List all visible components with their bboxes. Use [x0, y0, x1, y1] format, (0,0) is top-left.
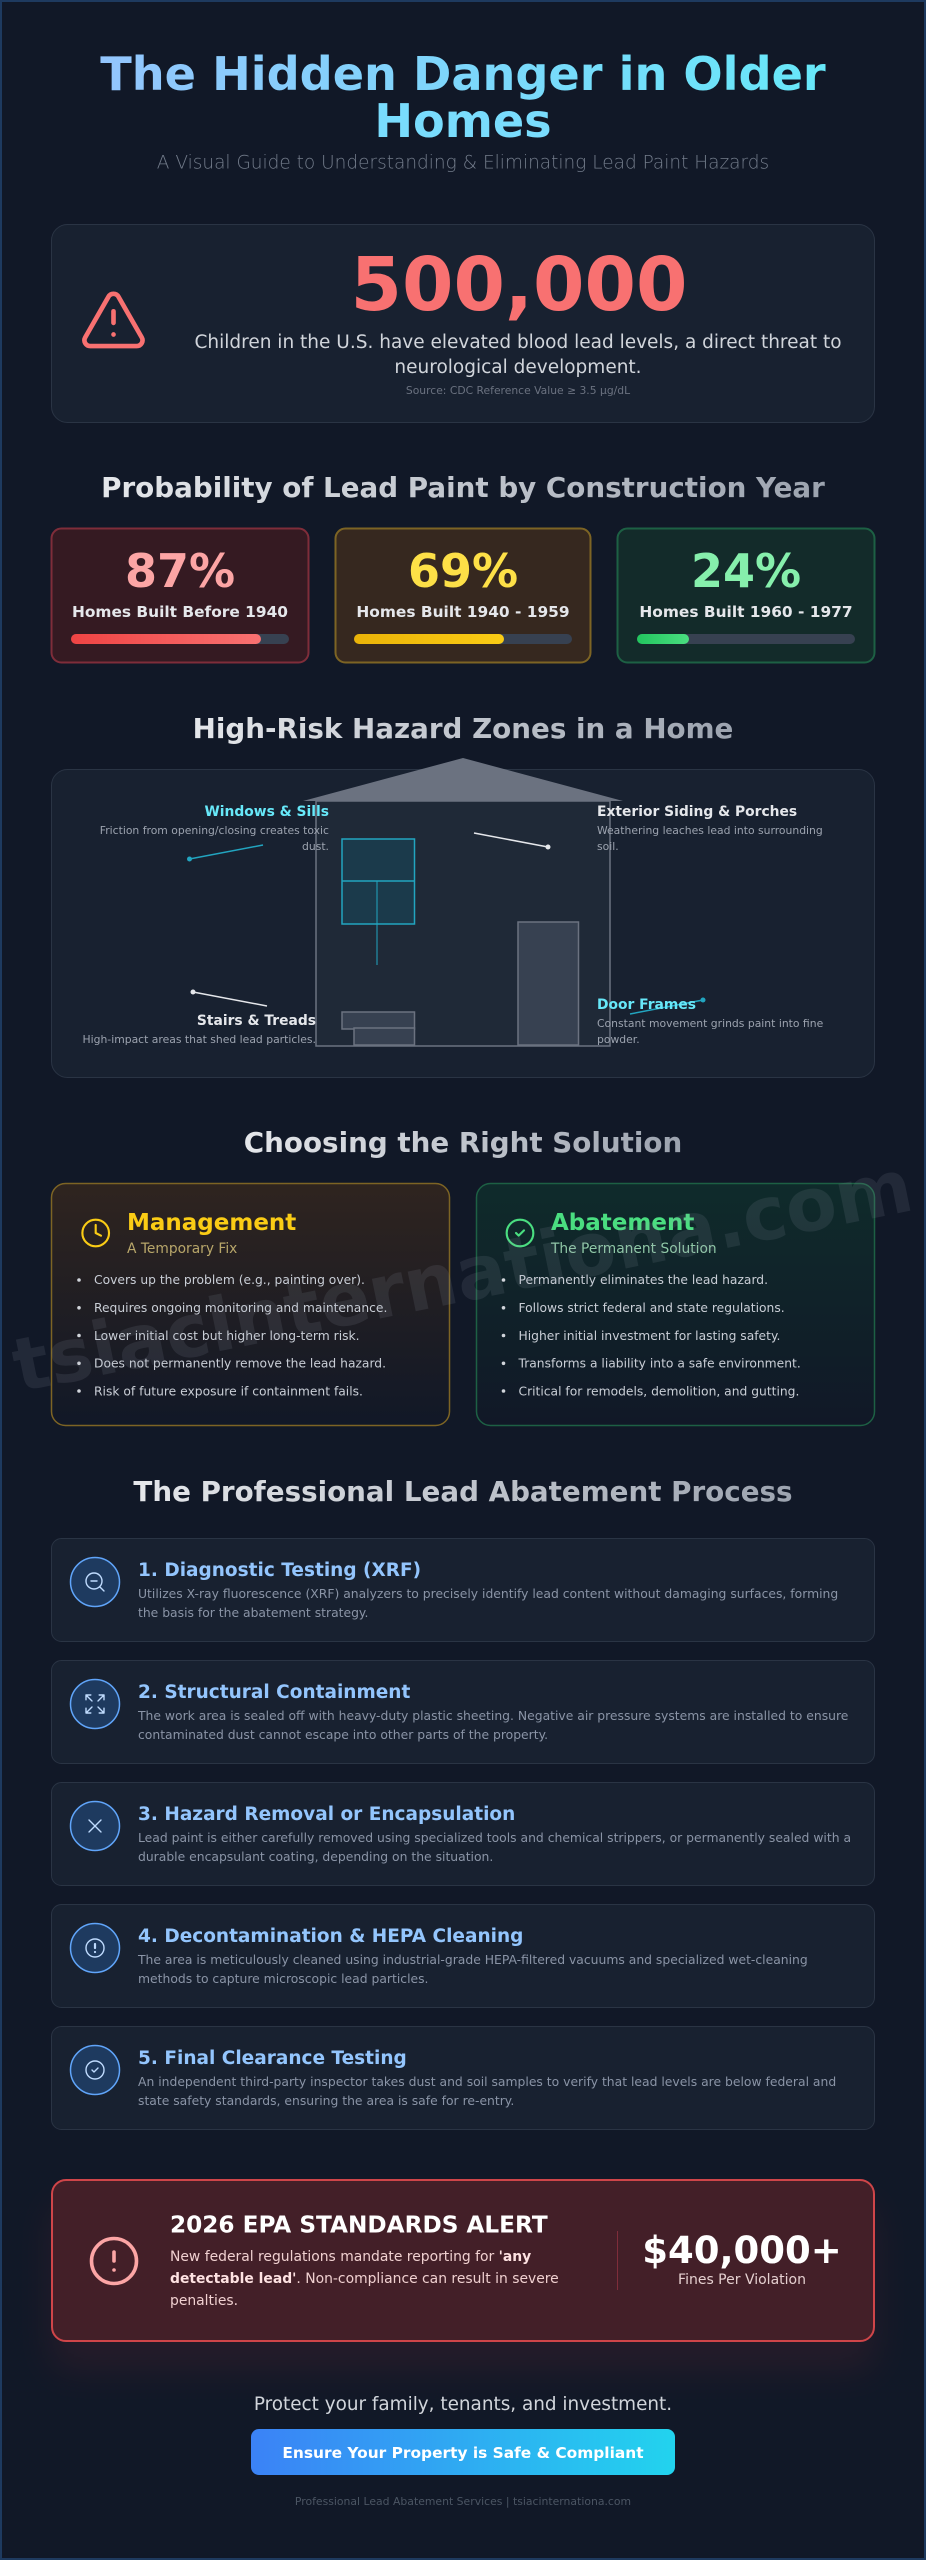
big number: 500,000	[350, 242, 688, 328]
label: exterior: Weathering leaches lead into surrounding	[597, 824, 823, 837]
icon: alert circle	[86, 1939, 104, 1957]
step 3: Lead paint is either carefully removed using specialized tools and chemical strippers, or permanently sealed with a	[138, 1831, 851, 1845]
panel: 1940-1959: Homes Built 1940 - 1959	[356, 603, 570, 621]
step 5: 5. Final Clearance Testing	[138, 2048, 407, 2069]
label: exterior	[597, 804, 823, 853]
heading: hazard zones: High-Risk Hazard Zones in a Home	[193, 712, 733, 745]
subtitle: A Visual Guide to Understanding & Eliminating Lead Paint Hazards	[157, 152, 769, 174]
list: management: Lower initial cost but higher long-term risk.	[94, 1329, 360, 1343]
panel: 1940-1959	[336, 528, 590, 662]
label: windows: dust.	[302, 840, 329, 853]
statistic description	[194, 332, 842, 378]
title: The Hidden Danger in Older	[100, 47, 826, 101]
label: exterior: Exterior Siding & Porches	[597, 804, 797, 820]
list: abatement: Permanently eliminates the lead hazard.	[518, 1273, 768, 1287]
panel: abatement: Abatement	[551, 1210, 694, 1236]
step 4: The area is meticulously cleaned using industrial-grade HEPA-filtered vacuums and specialized wet-cleaning	[137, 1953, 808, 1967]
panel: 1960-1977	[618, 528, 874, 662]
leader line: windows	[187, 845, 263, 862]
icon: clock	[82, 1220, 109, 1246]
step 1: the basis for the abatement strategy.	[138, 1606, 368, 1620]
icon: cross	[89, 1820, 101, 1832]
icon: expand arrows	[86, 1695, 104, 1713]
source note: Source: CDC Reference Value ≥ 3.5 µg/dL	[406, 384, 630, 397]
label: door: Door Frames	[597, 997, 696, 1013]
alert text	[170, 2249, 559, 2309]
list: abatement: Follows strict federal and state regulations.	[518, 1301, 785, 1315]
label: exterior: soil.	[597, 840, 619, 853]
statistic description: Children in the U.S. have elevated blood lead levels, a direct threat to	[194, 332, 842, 353]
step 3: durable encapsulant coating, depending on the situation.	[138, 1850, 493, 1864]
label: door: Constant movement grinds paint into fine	[597, 1017, 824, 1030]
statistic description: neurological development.	[394, 357, 642, 378]
label: windows: Friction from opening/closing creates toxic	[100, 824, 329, 837]
label: door: powder.	[597, 1033, 640, 1046]
icon: check circle	[507, 1220, 533, 1246]
leader line: exterior	[474, 833, 550, 850]
icon: warning triangle	[84, 294, 142, 346]
panel: EPA alert	[52, 2180, 874, 2341]
step 4: 4. Decontamination & HEPA Cleaning	[138, 1926, 523, 1947]
icon: alert circle	[92, 2238, 136, 2284]
list: management	[77, 1273, 387, 1398]
step 5: An independent third-party inspector takes dust and soil samples to verify that lead levels are below federal and	[138, 2075, 836, 2089]
title	[100, 47, 826, 148]
step 2: The work area is sealed off with heavy-duty plastic sheeting. Negative air pressure systems are installed to ensure	[137, 1709, 848, 1723]
panel: before 1940: 87%	[125, 544, 235, 598]
panel: EPA alert: Fines Per Violation	[678, 2272, 806, 2288]
list: abatement: Critical for remodels, demolition, and gutting.	[518, 1384, 799, 1398]
step 5	[52, 2026, 874, 2130]
footer: Professional Lead Abatement Services | tsiacinternationa.com	[295, 2495, 631, 2508]
panel: before 1940: Homes Built Before 1940	[72, 603, 288, 621]
list: management: Covers up the problem (e.g., painting over).	[94, 1273, 365, 1287]
panel: management: A Temporary Fix	[127, 1241, 237, 1257]
panel: 1960-1977: Homes Built 1960 - 1977	[639, 603, 853, 621]
panel: abatement	[476, 1184, 874, 1426]
step 3	[52, 1782, 874, 1886]
panel: 1940-1959: 69%	[408, 544, 518, 598]
list: abatement: Higher initial investment for lasting safety.	[518, 1329, 780, 1343]
label: windows: Windows & Sills	[205, 804, 329, 820]
watermark: tsiacinternationa.com	[5, 1143, 920, 1410]
label: stairs: High-impact areas that shed lead particles.	[82, 1033, 316, 1046]
step 4	[52, 1904, 874, 2008]
step 1: Utilizes X-ray fluorescence (XRF) analyzers to precisely identify lead content without damaging surfaces, forming	[138, 1587, 838, 1601]
label: door	[597, 997, 824, 1046]
list: abatement: Transforms a liability into a safe environment.	[518, 1356, 801, 1370]
alert text: New federal regulations mandate reporting for 'any	[170, 2249, 531, 2265]
panel: management: Management	[127, 1210, 296, 1236]
label: windows	[100, 804, 329, 853]
leader line: door	[630, 998, 706, 1014]
label: stairs	[82, 1013, 316, 1046]
call to action text: Protect your family, tenants, and investment.	[254, 2394, 672, 2415]
step 1	[52, 1538, 874, 1642]
panel: EPA alert: 2026 EPA STANDARDS ALERT	[170, 2212, 548, 2238]
step 5: state safety standards, ensuring the area is safe for re-entry.	[138, 2094, 514, 2108]
heading: solution: Choosing the Right Solution	[244, 1126, 682, 1159]
leader line: stairs	[190, 990, 267, 1006]
panel: before 1940	[52, 528, 308, 662]
title: Homes	[374, 94, 552, 148]
alert text: penalties.	[170, 2293, 238, 2309]
label: stairs: Stairs & Treads	[197, 1013, 316, 1029]
step 2	[52, 1660, 874, 1764]
heading: probability: Probability of Lead Paint by Construction Year	[101, 471, 825, 504]
step 2: 2. Structural Containment	[138, 1682, 410, 1703]
panel: abatement: The Permanent Solution	[550, 1241, 717, 1257]
panel: management	[52, 1184, 450, 1426]
list: management: Does not permanently remove the lead hazard.	[94, 1356, 386, 1370]
list: abatement	[502, 1273, 801, 1398]
button: Ensure Your Property is Safe & Compliant	[282, 2444, 644, 2462]
icon: check circle	[86, 2061, 104, 2079]
heading: process: The Professional Lead Abatement Process	[133, 1475, 793, 1508]
list: management: Risk of future exposure if containment fails.	[94, 1384, 363, 1398]
step 1: 1. Diagnostic Testing (XRF)	[138, 1560, 421, 1581]
step 2: contaminated dust cannot escape into other parts of the property.	[138, 1728, 548, 1742]
icon: magnifier	[86, 1573, 104, 1591]
step 4: methods to capture microscopic lead particles.	[138, 1972, 428, 1986]
alert text: detectable lead'. Non-compliance can result in severe	[170, 2271, 559, 2287]
step 3: 3. Hazard Removal or Encapsulation	[138, 1804, 515, 1825]
list: management: Requires ongoing monitoring and maintenance.	[94, 1301, 387, 1315]
panel: headline statistic	[52, 224, 874, 422]
panel: hazard zones	[52, 758, 874, 1078]
fine amount: $40,000+	[642, 2229, 842, 2272]
panel: 1960-1977: 24%	[691, 544, 801, 598]
house diagram	[303, 758, 623, 1046]
button	[251, 2429, 675, 2475]
